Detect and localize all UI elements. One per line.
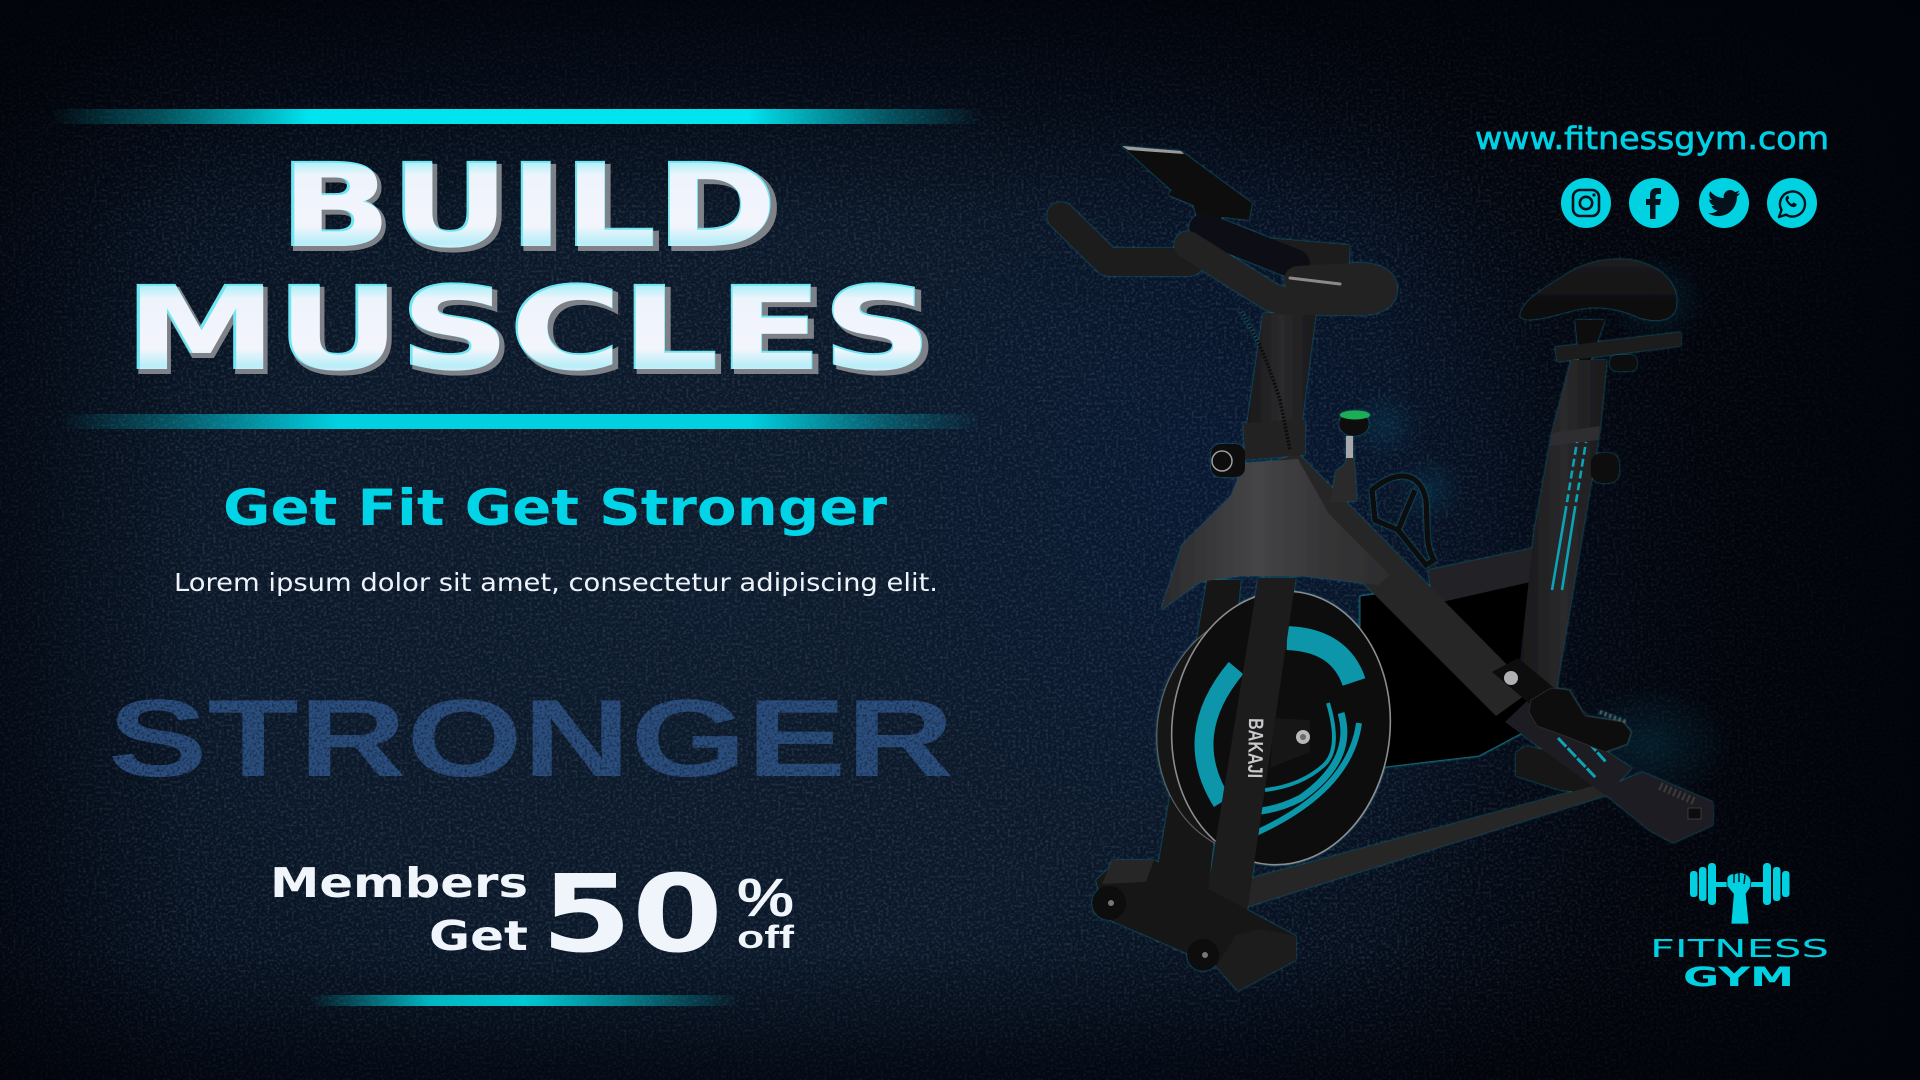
frame shroud: [1161, 459, 1390, 610]
fitness gym logo: [1650, 863, 1829, 993]
offer: Members Get 50% off: [270, 853, 794, 977]
bottom glowing rule: [310, 995, 740, 1006]
crank and pedal: [1492, 658, 1631, 752]
rear stabilizer: [1516, 746, 1713, 843]
title: BUILD MUSCLES: [124, 139, 937, 399]
saddle post bracket: [1555, 320, 1681, 362]
offer: Members Get 50% off: off: [737, 919, 794, 955]
offer: Members Get 50% off: Members: [270, 859, 528, 907]
front stabilizer: [1092, 860, 1296, 991]
watermark: STRONGER: STRONGER: [108, 677, 954, 800]
logo word: GYM: GYM: [1683, 962, 1794, 993]
icon: instagram: [1561, 178, 1611, 228]
bottle cage: [1372, 476, 1434, 565]
handlebars: [1061, 216, 1383, 301]
black drive casing: [1360, 572, 1540, 770]
rear down tube: [1505, 700, 1632, 796]
title: BUILD MUSCLES: BUILD: [281, 140, 777, 273]
title: BUILD MUSCLES: MUSCLES: [124, 262, 932, 395]
post collar: [1243, 419, 1305, 460]
icon: twitter: [1699, 178, 1749, 228]
icon: facebook: [1629, 178, 1679, 228]
offer: Members Get 50% off: 50: [541, 853, 723, 977]
main diagonal tube: [1250, 453, 1532, 716]
console block: [1268, 238, 1350, 282]
resistance knob: [1330, 410, 1370, 503]
title: BUILD MUSCLES: MUSCLES: [126, 263, 932, 396]
long base rail: [1243, 783, 1608, 908]
offer: Members Get 50% off: Get: [429, 912, 528, 960]
offer: Members Get 50% off: %: [737, 868, 794, 928]
lower glowing rule: [60, 414, 980, 429]
handlebar post: [1247, 313, 1316, 423]
front fork tube: [1203, 578, 1296, 931]
horizontal frame tube: [1428, 546, 1543, 604]
body text: Lorem ipsum dolor sit amet, consectetur adipiscing elit.: [174, 568, 938, 597]
flywheel: [1145, 580, 1404, 876]
top glowing rule: [50, 109, 980, 124]
logo word: FITNESS: FITNESS: [1650, 934, 1829, 963]
icon: dumbbell and fist: [1690, 863, 1790, 924]
brand label: BAKAJI: [1243, 718, 1267, 778]
exercise bike: [1061, 146, 1730, 991]
title: BUILD MUSCLES: MUSCLES: [127, 266, 937, 399]
glows behind bike parts: [1350, 255, 1730, 805]
seat knobs: [1591, 355, 1637, 483]
icon: whatsapp: [1767, 178, 1817, 228]
front leg behind flywheel: [1153, 580, 1241, 925]
saddle: [1520, 259, 1677, 320]
curly cable: [1240, 310, 1290, 450]
collar knob: [1211, 444, 1245, 477]
subtitle: Get Fit Get Stronger: [223, 479, 887, 537]
social icons: [1561, 178, 1817, 228]
tablet holder: [1122, 146, 1252, 233]
title: BUILD MUSCLES: BUILD: [279, 139, 777, 272]
rear tube stripes: [1558, 738, 1606, 778]
title: BUILD MUSCLES: BUILD: [282, 143, 782, 276]
website url: www.fitnessgym.com: [1475, 121, 1829, 157]
seat tube: [1520, 360, 1607, 692]
